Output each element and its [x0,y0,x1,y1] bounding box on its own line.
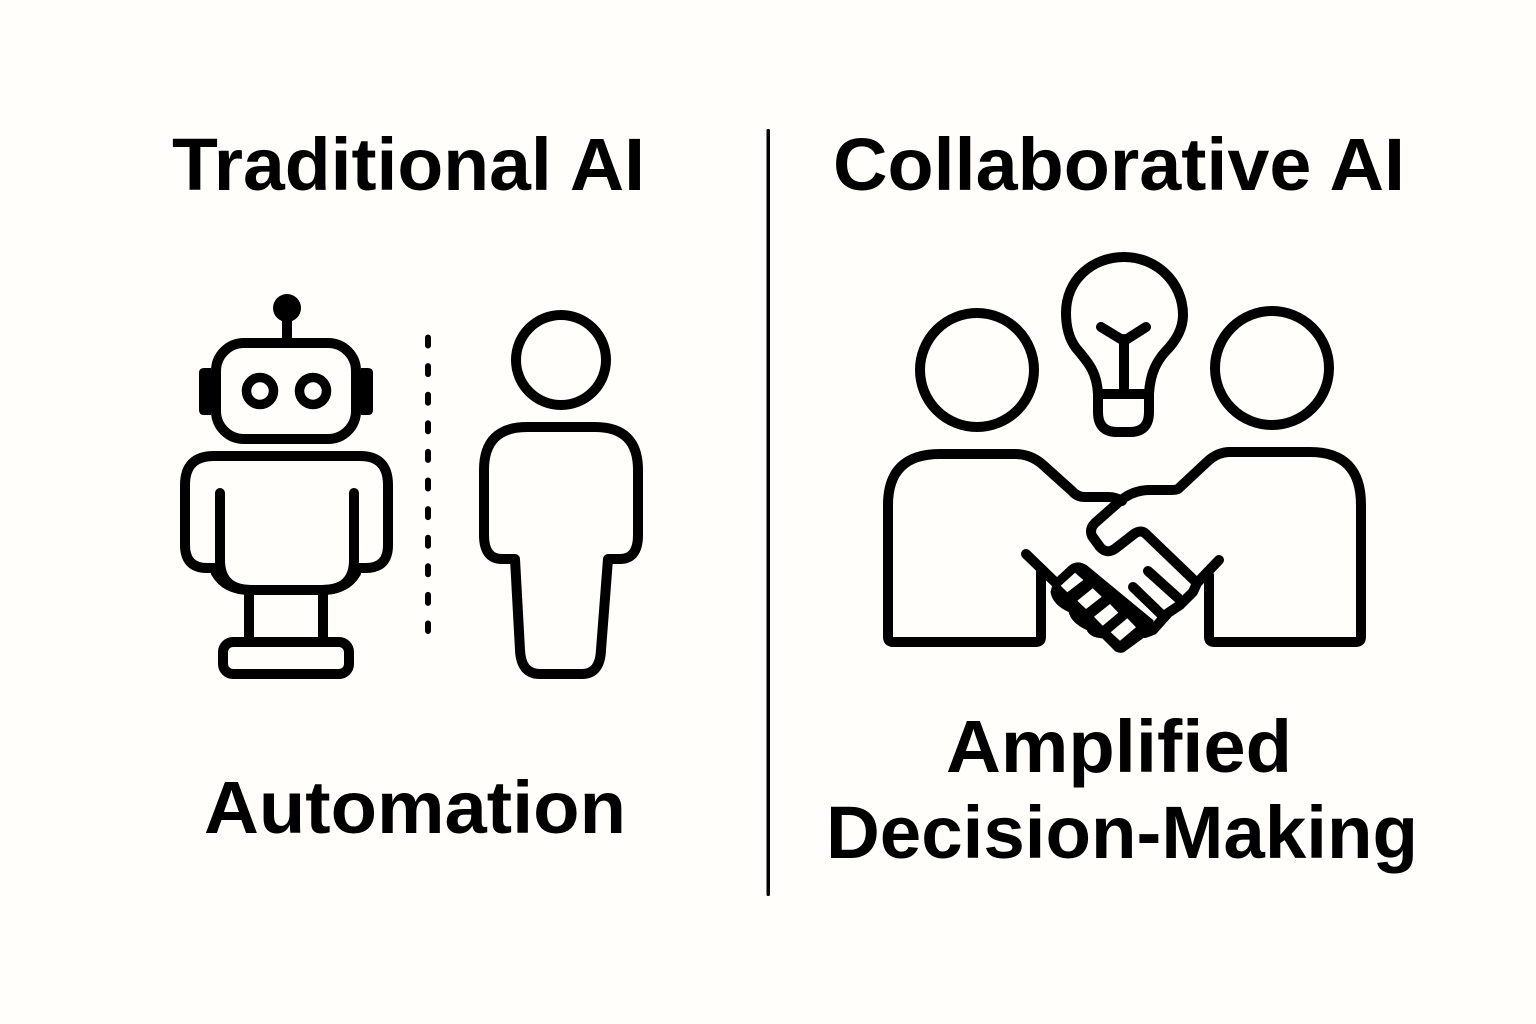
icon: right collaborator [1091,311,1361,642]
icon: person [484,315,638,674]
label: Amplified Decision-Making: Amplified [946,705,1292,788]
icon: robot [185,294,388,674]
icon: left collaborator [888,313,1122,642]
left hand silhouette [1052,564,1152,651]
label: Amplified Decision-Making [826,705,1418,874]
heading: Collaborative AI: Collaborative AI [833,123,1405,206]
label: Amplified Decision-Making: Decision-Making [826,791,1418,874]
right hand fingers [1133,571,1178,615]
heading: Traditional AI: Traditional AI [172,123,645,206]
icon: light bulb [1066,257,1183,432]
label: Automation: Automation [204,766,626,849]
dashed separator [425,338,431,631]
icon: handshake [1026,554,1219,651]
center divider [766,129,770,896]
wrists and lower outline [1026,554,1219,633]
left hand finger gaps [1061,573,1136,641]
